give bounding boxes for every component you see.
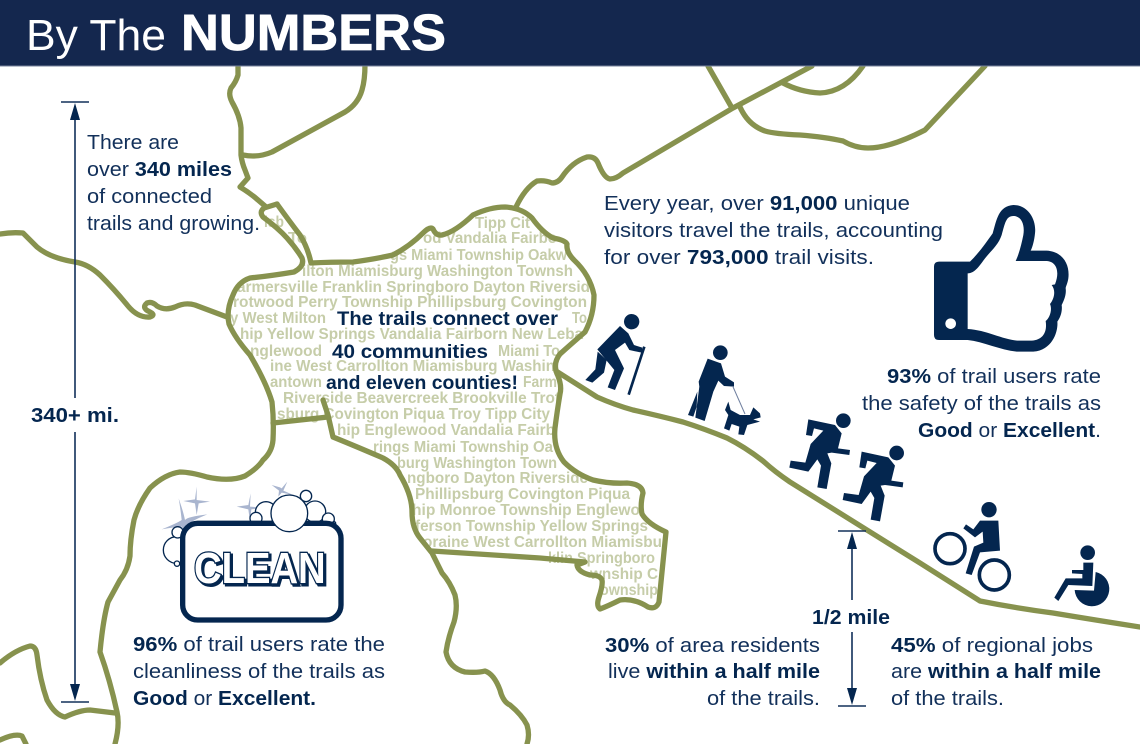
community names word cloud: Tipp Cit — [475, 215, 530, 232]
community names word cloud: gs Miami Township Oakw — [390, 247, 568, 264]
text: communities callout — [326, 309, 559, 394]
text: 340 miles: trails and growing. — [87, 212, 260, 235]
text: safety rating: 93% of trail users rate — [887, 365, 1101, 388]
text: visitors — [604, 192, 943, 269]
text: jobs — [891, 634, 1101, 710]
text: safety rating: the safety of the trails as — [862, 392, 1101, 415]
text: safety rating: Good or Excellent. — [918, 419, 1101, 442]
text: jobs: 45% of regional jobs — [891, 634, 1093, 657]
icon: thumbs up — [934, 205, 1069, 352]
clean word: CLEAN — [196, 546, 328, 595]
text: 340 miles — [87, 131, 260, 235]
half mile label: 1/2 mile — [812, 607, 890, 629]
text: communities callout: The trails connect over — [337, 309, 559, 330]
text: visitors: visitors travel the trails, accounting — [604, 219, 943, 242]
sparkles — [162, 482, 293, 544]
community names word cloud: rotwood Perry Township Phillipsburg Covington — [233, 294, 587, 311]
text: residents: 30% of area residents — [605, 634, 820, 657]
header bar — [0, 0, 1140, 66]
community names word cloud: wnship C — [589, 566, 658, 583]
community names word cloud: sburg Covington Piqua Troy Tipp City — [277, 406, 550, 423]
icon: wheelchair user — [1054, 545, 1109, 606]
text: cleanliness rating: Good or Excellent. — [133, 687, 316, 710]
title: By The — [26, 11, 166, 60]
half mile dimension arrow — [812, 531, 890, 706]
trail users icons — [585, 314, 904, 521]
community names word cloud: hip Englewood Vandalia Fairb — [337, 422, 555, 439]
community names word cloud: klin Springboro — [548, 550, 655, 567]
community names word cloud: ine West Carrollton Miamisburg Washin — [270, 358, 555, 375]
340+ mi label: 340+ mi. — [31, 405, 119, 427]
text: visitors: Every year, over 91,000 unique — [604, 192, 910, 215]
text: residents — [605, 634, 820, 710]
community names word cloud: Miami To — [498, 343, 560, 360]
community names word cloud: burg Washington Town — [397, 455, 557, 472]
community names word cloud: ngboro Dayton Riverside — [407, 470, 588, 487]
icon: runner two — [843, 446, 904, 521]
text: 340 miles: of connected — [87, 185, 212, 208]
text: communities callout: 40 communities — [332, 342, 488, 363]
text: safety rating — [862, 365, 1101, 442]
community names word cloud: hip Yellow Springs Vandalia Fairborn New Leba — [240, 326, 583, 343]
text: cleanliness rating — [133, 633, 385, 710]
community names word cloud: isb — [264, 214, 284, 231]
community names word cloud: To — [288, 230, 307, 247]
text: 340 miles: There are — [87, 131, 179, 154]
icon: runner one — [789, 413, 851, 489]
text: visitors: for over 793,000 trail visits. — [604, 246, 874, 269]
text: jobs: of the trails. — [891, 687, 1004, 710]
icon: dog walker — [688, 345, 761, 435]
community names word cloud: Riverside Beavercreek Brookville Trot — [283, 390, 560, 407]
text: communities callout: and eleven counties! — [326, 373, 518, 394]
text: 340 miles: over 340 miles — [87, 158, 232, 181]
icon: hiker — [585, 314, 644, 395]
title: NUMBERS — [181, 4, 446, 61]
community names word cloud: y West Milton — [230, 310, 326, 327]
text: jobs: are within a half mile — [891, 660, 1101, 683]
title — [26, 4, 446, 61]
text: cleanliness rating: cleanliness of the trails as — [133, 660, 385, 683]
icon: cyclist — [935, 502, 1009, 590]
community names word cloud: rings Miami Township Oa — [373, 439, 553, 456]
community names word cloud: To — [572, 310, 587, 327]
340 mile dimension arrow — [31, 102, 119, 702]
community names word cloud: oraine West Carrollton Miamisbu — [423, 534, 662, 551]
community names word cloud: armersville Franklin Springboro Dayton Riversid — [237, 279, 590, 296]
community names word cloud: ownship — [600, 582, 658, 599]
community names word cloud: ilton Miamisburg Washington Townsh — [302, 263, 573, 280]
community names word cloud: ferson Township Yellow Springs — [415, 518, 648, 535]
community names word cloud: Phillipsburg Covington Piqua — [415, 486, 630, 503]
community names word cloud: antown — [270, 374, 322, 391]
bubbles — [163, 490, 336, 566]
community names word cloud — [230, 214, 662, 599]
text: residents: of the trails. — [707, 687, 820, 710]
community names word cloud: Farm — [523, 374, 557, 391]
text: cleanliness rating: 96% of trail users rate the — [133, 633, 385, 656]
community names word cloud: nglewood — [250, 343, 322, 360]
clean word: CLEAN — [194, 544, 326, 593]
community names word cloud: hip Monroe Township Englewo — [412, 502, 640, 519]
community names word cloud: od Vandalia Fairbo — [423, 230, 557, 247]
icon: clean soap — [162, 482, 341, 620]
text: residents: live within a half mile — [608, 660, 820, 683]
